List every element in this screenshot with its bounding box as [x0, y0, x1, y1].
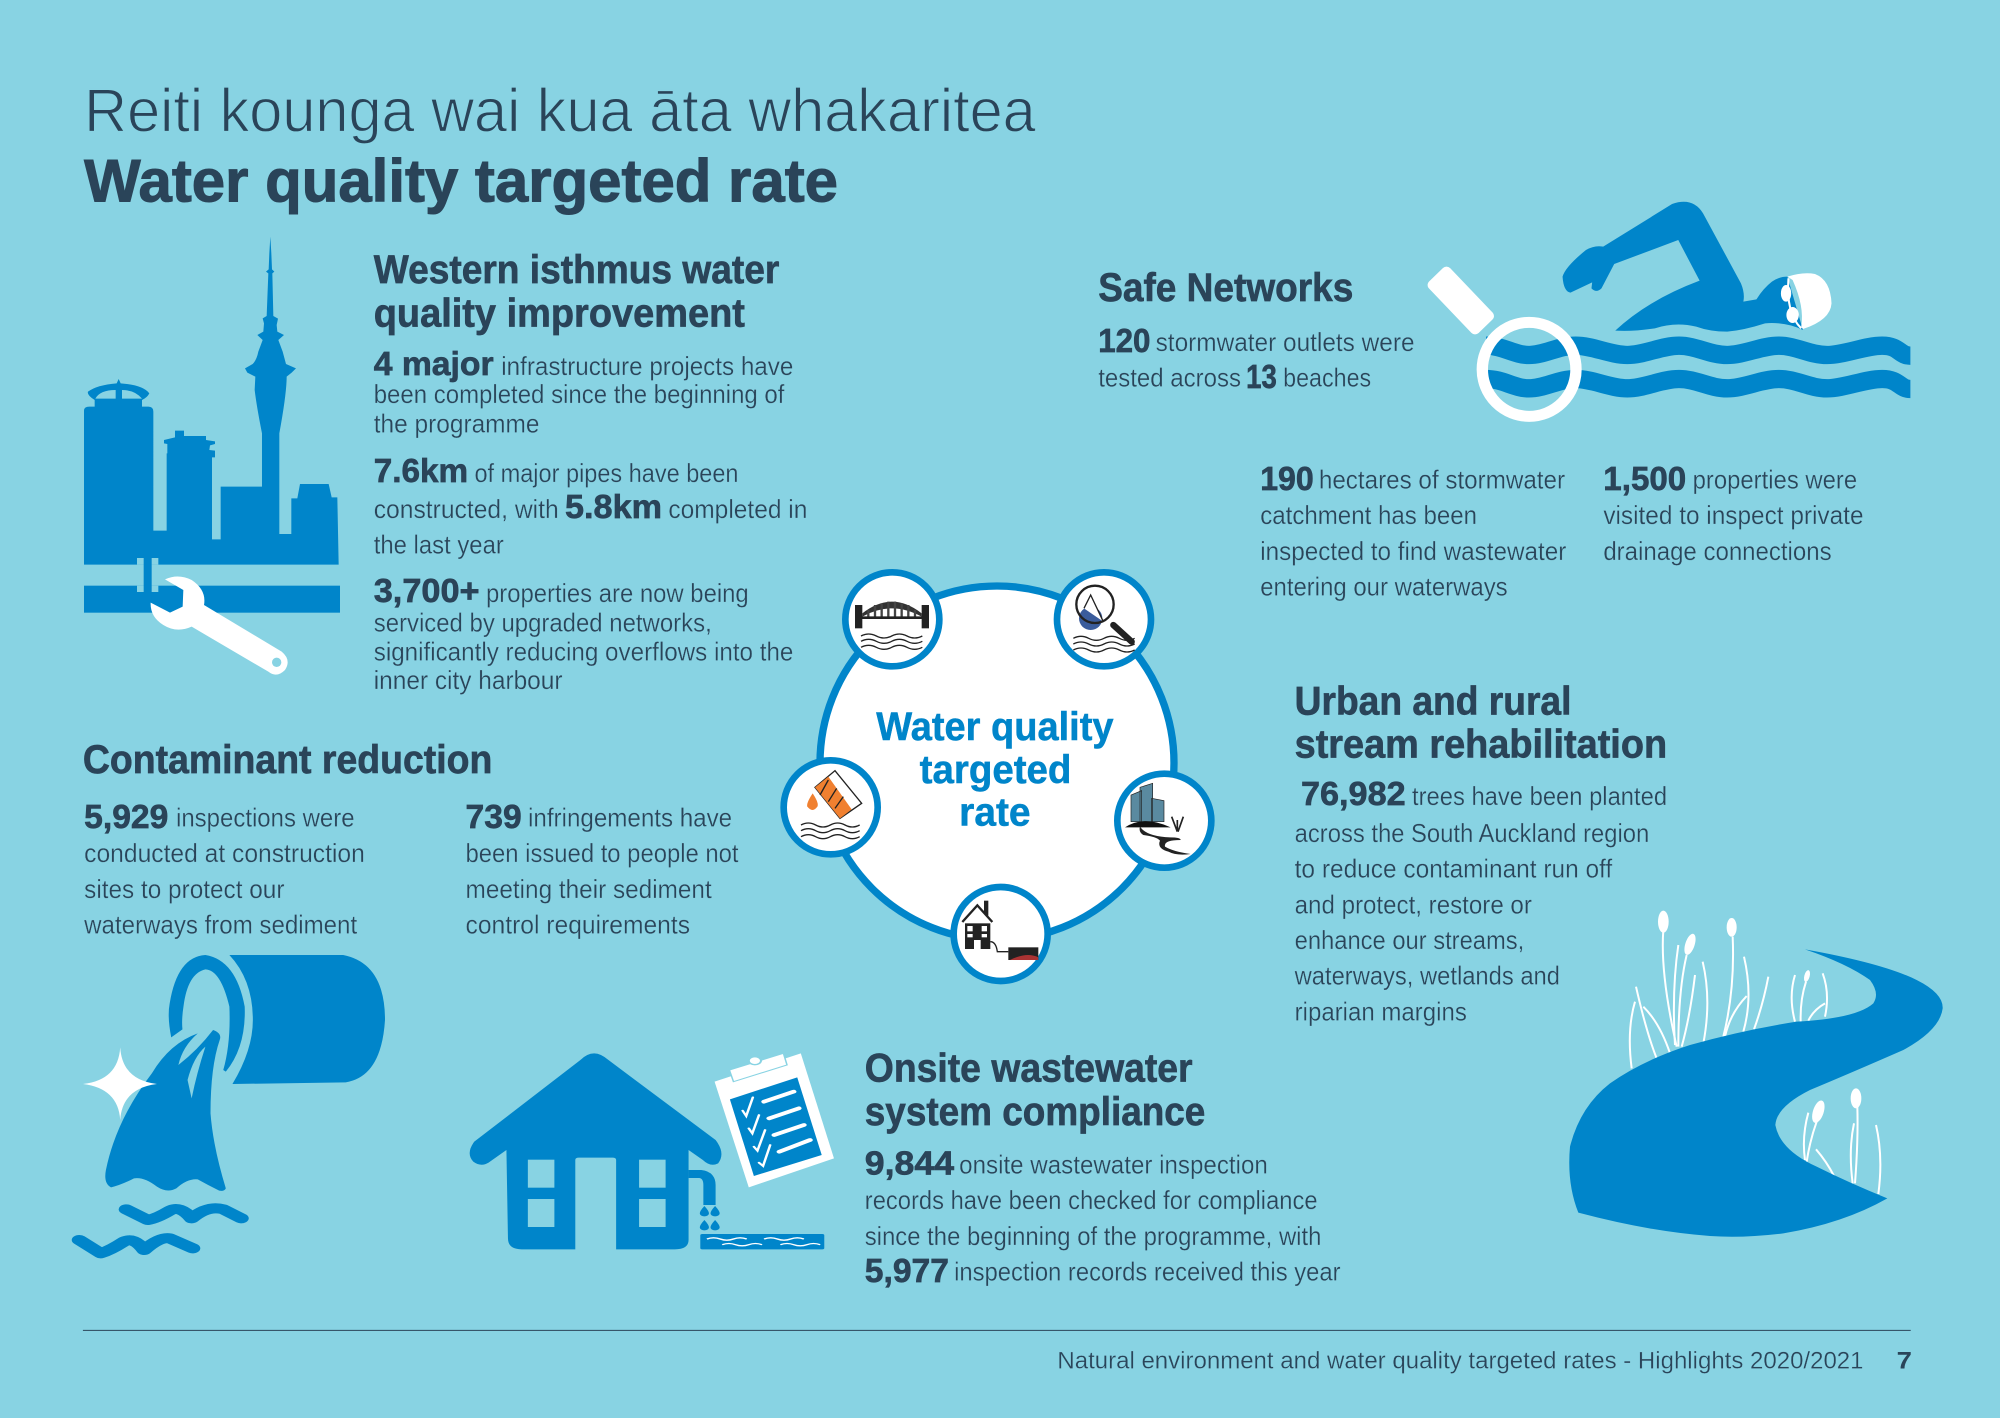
text block: 76,982 trees: across the South Auckland region [1295, 820, 1649, 848]
panel: Onsite wastewater system compliance [470, 1047, 1341, 1290]
text block: 120 outlets: 120 [1098, 323, 1151, 360]
text block: 739: 739 [466, 799, 522, 836]
text block: 120 outlets: stormwater outlets were [1156, 329, 1415, 357]
diagram: central water quality circle [784, 572, 1211, 981]
text block: 5,929 [83, 799, 365, 940]
text block: 1,500 properties: drainage connections [1603, 538, 1832, 566]
text block: 3,700+: properties are now being [486, 580, 749, 608]
text block: 76,982 trees: to reduce contaminant run off [1295, 856, 1613, 884]
text block: 4 major: been completed since the beginning of [374, 381, 785, 409]
panel: Contaminant reduction [79, 738, 739, 1253]
text block: 7.6km: of major pipes have been [474, 460, 739, 488]
heading: stream rehabilitation [1295, 723, 1667, 767]
icon: sediment barrier [784, 760, 878, 854]
heading [374, 248, 779, 336]
text block: 5,929: sites to protect our [84, 876, 285, 904]
icon: harbour bridge [845, 572, 939, 666]
panel: Urban and rural stream rehabilitation [1294, 679, 1943, 1237]
panel: Western isthmus water quality improvement [84, 237, 807, 695]
heading [1295, 679, 1667, 767]
text block: 1,500 properties: visited to inspect private [1603, 502, 1864, 530]
circle label: targeted [920, 748, 1071, 792]
text block: 3,700+ [374, 573, 793, 695]
heading: quality improvement [374, 292, 745, 336]
icon: pipe pouring water [79, 955, 385, 1253]
text block: 4 major: 4 major [374, 346, 494, 383]
text block: inspection records: 5,977 [865, 1253, 949, 1290]
text block: 5,929: inspections were [176, 805, 355, 833]
footer text: Natural environment and water quality targeted rates - Highlights 2020/2021 [1057, 1348, 1864, 1375]
title: English: Water quality targeted rate [84, 148, 838, 215]
text block: 120 outlets: beaches [1283, 364, 1371, 392]
text block: 7.6km: 5.8km [565, 489, 662, 526]
text block: inspection records: since the beginning of the programme, with [865, 1223, 1321, 1251]
heading: Onsite wastewater [865, 1047, 1193, 1091]
heading: Safe Networks [1098, 266, 1353, 310]
icon: magnified water drop [1057, 572, 1151, 666]
heading: Urban and rural [1295, 679, 1571, 723]
text block: inspection records: inspection records received this year [954, 1259, 1341, 1287]
text block: 7.6km: constructed, with [374, 496, 559, 524]
text block: 5,929: waterways from sediment [83, 912, 357, 940]
text block: 190 hectares: catchment has been [1260, 502, 1477, 530]
text block: 190 hectares: entering our waterways [1260, 574, 1508, 602]
text block: 1,500 properties: 1,500 [1603, 461, 1686, 498]
text block: 3,700+: inner city harbour [374, 667, 563, 695]
text block: 76,982 trees: enhance our streams, [1295, 927, 1524, 955]
text block: 7.6km: completed in [668, 496, 807, 524]
page number: 7 [1897, 1348, 1912, 1375]
text block: 4 major [374, 346, 793, 438]
text block: 120 outlets: tested across [1098, 364, 1241, 392]
circle label: Water quality [876, 705, 1114, 749]
heading [865, 1047, 1205, 1134]
text block: 76,982 trees [1294, 776, 1667, 1026]
text block: 5,929: 5,929 [84, 799, 168, 836]
title: Māori: Reiti kounga wai kua āta whakaritea [84, 76, 1037, 144]
text block: 190 hectares [1260, 461, 1567, 602]
text block: 739: been issued to people not [466, 840, 739, 868]
text block: inspection records: records have been checked for compliance [865, 1187, 1318, 1215]
main circle [820, 586, 1174, 940]
text block: 3,700+: serviced by upgraded networks, [374, 609, 712, 637]
text block: 1,500 properties: properties were [1693, 467, 1857, 495]
text block: 739: control requirements [466, 912, 690, 940]
text block: 120 outlets [1098, 323, 1415, 396]
text block: 76,982 trees: trees have been planted [1412, 783, 1667, 811]
text block: 120 outlets: 13 [1246, 359, 1277, 396]
panel: stormwater catchment stat [1260, 461, 1864, 602]
icon: stream with reeds [1569, 911, 1943, 1237]
text block: inspection records [865, 1146, 1341, 1290]
icon: house and septic tank [954, 887, 1048, 981]
text block: 5,929: conducted at construction [84, 840, 365, 868]
footer [1057, 1348, 1912, 1375]
icon: city and stream [1117, 774, 1211, 868]
icon: Auckland skyline with pipe and spanner [84, 237, 340, 675]
panel: Safe Networks [1098, 202, 1910, 416]
text block: inspection records: onsite wastewater inspection [959, 1151, 1268, 1179]
text block: 7.6km: the last year [374, 532, 504, 560]
text block: 7.6km: 7.6km [374, 453, 468, 490]
circle label [876, 705, 1114, 834]
icon: house with downpipe and clipboard [470, 1053, 834, 1249]
text block: 76,982 trees: riparian margins [1295, 998, 1467, 1026]
heading: Contaminant reduction [83, 738, 492, 782]
text block: 76,982 trees: 76,982 [1301, 776, 1406, 813]
text block: 190 hectares: inspected to find wastewater [1260, 538, 1567, 566]
icon: swimmer and magnifying glass [1433, 202, 1910, 416]
text block: 3,700+: significantly reducing overflows into the [374, 639, 793, 667]
text block: 3,700+: 3,700+ [374, 573, 480, 610]
text block: 739 [466, 799, 739, 940]
text block: 739: infringements have [528, 805, 732, 833]
heading: system compliance [865, 1090, 1205, 1134]
text block: 739: meeting their sediment [466, 876, 712, 904]
text block: 190 hectares: hectares of stormwater [1319, 467, 1566, 495]
text block: 1,500 properties [1603, 461, 1864, 566]
text block: inspection records: 9,844 [865, 1146, 955, 1183]
text block: 7.6km [374, 453, 807, 560]
title [84, 76, 1037, 215]
circle label: rate [959, 790, 1031, 834]
text block: 4 major: the programme [374, 410, 540, 438]
text block: 4 major: infrastructure projects have [501, 353, 793, 381]
text block: 190 hectares: 190 [1260, 461, 1314, 498]
text block: 76,982 trees: waterways, wetlands and [1294, 963, 1560, 991]
text block: 76,982 trees: and protect, restore or [1295, 891, 1532, 919]
heading: Western isthmus water [374, 248, 779, 292]
